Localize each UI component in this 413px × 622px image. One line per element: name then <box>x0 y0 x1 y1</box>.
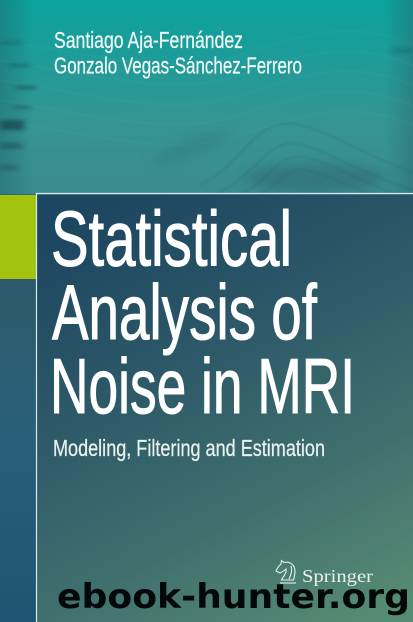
accent: green block <box>0 195 36 279</box>
authors <box>54 27 302 78</box>
panel: teal wave background <box>0 0 413 194</box>
title: Statistical <box>51 194 292 282</box>
authors: Santiago Aja-Fernández <box>54 27 243 53</box>
panel: title background <box>37 195 413 622</box>
panel: left strip <box>0 278 36 622</box>
subtitle: Modeling, Filtering and Estimation <box>53 435 325 461</box>
frame lines <box>36 194 413 622</box>
authors: Gonzalo Vegas-Sánchez-Ferrero <box>54 52 302 78</box>
watermark: ebook-hunter.org <box>57 577 410 617</box>
icon: Springer knight <box>276 560 296 583</box>
title <box>50 194 355 430</box>
logo: Springer: Springer <box>302 566 373 586</box>
